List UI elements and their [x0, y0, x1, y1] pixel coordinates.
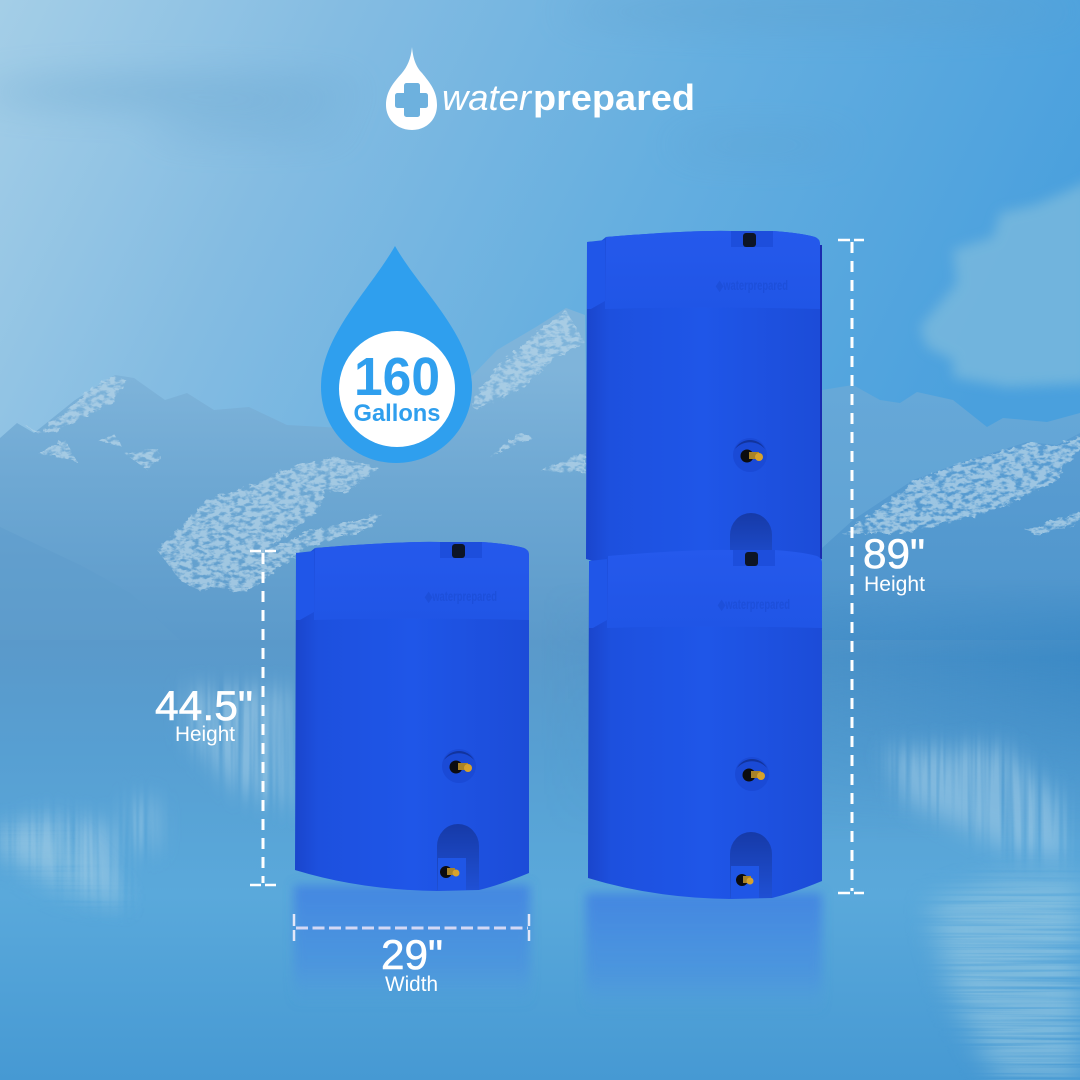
badge: 160 gallons drop — [321, 246, 472, 463]
tank reflections — [294, 885, 530, 1005]
cloud — [920, 180, 1080, 387]
dimension: 44.5 inch height: Height — [175, 723, 235, 746]
logo wordmark: prepared — [533, 77, 695, 118]
tank: stacked lower: ◆waterprepared — [717, 596, 790, 612]
logo wordmark: water — [442, 77, 533, 118]
dimension: 29 inch width: 29" — [381, 931, 443, 978]
dimension: 89 inch height — [838, 240, 925, 893]
icon: drop with cross — [386, 47, 437, 130]
mountains — [0, 308, 1080, 650]
tank: stacked upper — [586, 231, 822, 580]
tank: single — [295, 542, 529, 891]
dimension: 44.5 inch height — [155, 551, 276, 885]
background: sky — [0, 0, 1080, 660]
badge: 160 gallons drop: 160 — [354, 347, 440, 407]
right back range — [822, 385, 1080, 650]
right foreground ridge — [822, 433, 1080, 650]
snow — [23, 310, 1080, 593]
dimension: 44.5 inch height: 44.5" — [155, 682, 253, 729]
badge: 160 gallons drop: Gallons — [354, 400, 440, 427]
left foreground ridge — [0, 527, 180, 650]
dimension: 89 inch height: 89" — [863, 530, 925, 577]
water — [0, 580, 1080, 1080]
dimension: 89 inch height: Height — [864, 573, 925, 596]
left and central range — [0, 308, 590, 650]
logo — [386, 47, 695, 130]
dimension: 29 inch width — [294, 914, 529, 996]
dimension: 29 inch width: Width — [385, 973, 438, 996]
tank: stacked lower — [588, 550, 822, 899]
tank: single: ◆waterprepared — [424, 588, 497, 604]
tank: stacked upper: ◆waterprepared — [715, 277, 788, 293]
